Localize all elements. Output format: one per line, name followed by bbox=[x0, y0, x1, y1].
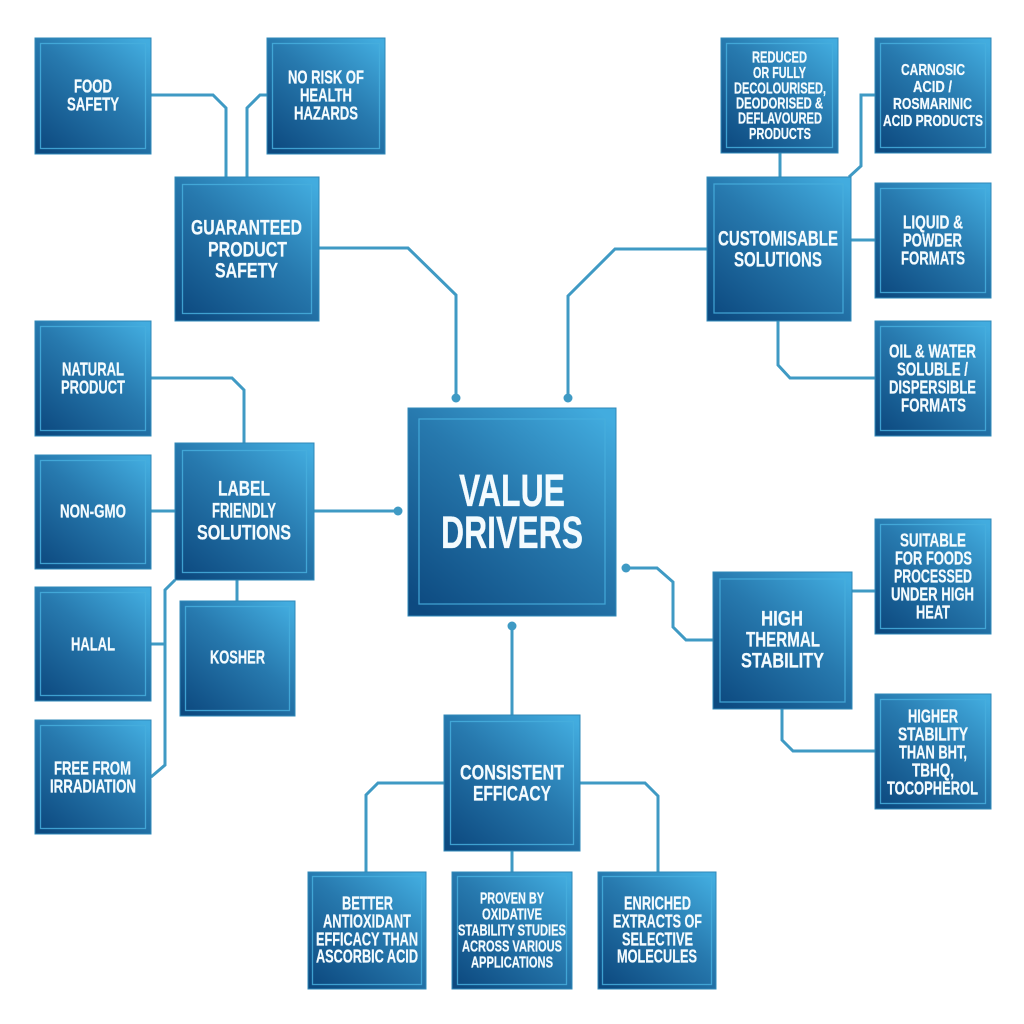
box: enriched extracts of selective molecules bbox=[598, 872, 716, 989]
box: kosher: KOSHER bbox=[210, 646, 265, 668]
box: liquid and powder formats: FORMATS bbox=[901, 248, 965, 268]
box: high thermal stability: STABILITY bbox=[741, 648, 824, 672]
connector: kosher bbox=[236, 580, 238, 601]
box: better antioxidant efficacy: EFFICACY THAN bbox=[316, 928, 418, 950]
connector: high thermal stability to value drivers bbox=[622, 564, 713, 640]
box: liquid and powder formats bbox=[875, 183, 991, 298]
box: food safety: SAFETY bbox=[67, 94, 119, 114]
box: consistent efficacy: EFFICACY bbox=[473, 782, 551, 806]
box: consistent efficacy bbox=[444, 715, 580, 851]
box: food safety bbox=[35, 38, 151, 154]
box: reduced or fully decolourised products bbox=[721, 38, 838, 153]
box: liquid and powder formats: LIQUID & bbox=[903, 212, 963, 232]
connector: label friendly solutions to value drivers bbox=[314, 506, 402, 516]
box: free from irradiation bbox=[35, 720, 151, 834]
box: no risk of health hazards: NO RISK OF bbox=[288, 66, 364, 88]
connector: higher stability bbox=[782, 709, 875, 751]
box: carnosic acid rosmarinic acid products: CARNOSIC bbox=[901, 62, 965, 79]
connector: food safety to guaranteed product safety bbox=[151, 95, 226, 177]
box: reduced or fully decolourised products: REDUCED bbox=[752, 50, 807, 66]
box: oil and water soluble formats bbox=[875, 321, 991, 436]
box: higher stability than bht tbhq tocopherol: STABILITY bbox=[898, 724, 968, 744]
box: oil and water soluble formats: OIL & WATER bbox=[889, 340, 976, 362]
box: natural product: PRODUCT bbox=[61, 376, 125, 398]
box: natural product bbox=[35, 321, 151, 436]
box: proven by oxidative stability studies: OXIDATIVE bbox=[482, 906, 542, 924]
connector: enriched extracts bbox=[580, 783, 658, 872]
box: high thermal stability: THERMAL bbox=[746, 628, 820, 652]
box: customisable solutions: SOLUTIONS bbox=[734, 248, 822, 272]
box: carnosic acid rosmarinic acid products: ACID PRODUCTS bbox=[883, 113, 983, 130]
box: proven by oxidative stability studies: STABILITY STUDIES bbox=[458, 922, 566, 940]
box: oil and water soluble formats: DISPERSIBLE bbox=[889, 376, 976, 398]
box: guaranteed product safety: SAFETY bbox=[215, 258, 278, 282]
central box: value drivers: DRIVERS bbox=[441, 507, 583, 558]
box: reduced or fully decolourised products: DEODORISED & bbox=[736, 96, 823, 112]
box: better antioxidant efficacy bbox=[308, 872, 426, 989]
box: no risk of health hazards: HEALTH bbox=[300, 84, 352, 106]
connector: better antioxidant bbox=[366, 783, 444, 872]
box: no risk of health hazards bbox=[267, 38, 385, 154]
connector: oil and water bbox=[778, 321, 875, 378]
box: liquid and powder formats: POWDER bbox=[903, 230, 962, 250]
box: reduced or fully decolourised products: PRODUCTS bbox=[749, 126, 811, 143]
central box: value drivers: VALUE bbox=[459, 465, 565, 516]
connector: guaranteed product safety to value drivers bbox=[319, 248, 460, 402]
box: guaranteed product safety: GUARANTEED bbox=[191, 216, 302, 240]
box: better antioxidant efficacy: ANTIOXIDANT bbox=[323, 910, 411, 932]
box: suitable for foods processed under high heat: HEAT bbox=[916, 602, 950, 622]
box: reduced or fully decolourised products: DEFLAVOURED bbox=[738, 110, 822, 128]
box: reduced or fully decolourised products: DECOLOURISED, bbox=[734, 80, 826, 98]
box: label friendly solutions: FRIENDLY bbox=[212, 498, 276, 522]
box: free from irradiation: FREE FROM bbox=[54, 758, 131, 778]
box: higher stability than bht tbhq tocopherol: HIGHER bbox=[908, 706, 958, 726]
box: suitable for foods processed under high heat: PROCESSED bbox=[894, 566, 972, 586]
box: natural product: NATURAL bbox=[62, 358, 124, 380]
box: higher stability than bht tbhq tocopherol: TBHQ, bbox=[912, 760, 954, 780]
box: enriched extracts of selective molecules: ENRICHED bbox=[624, 892, 691, 914]
box: proven by oxidative stability studies: APPLICATIONS bbox=[471, 954, 553, 972]
box: proven by oxidative stability studies bbox=[452, 872, 572, 989]
central box: value drivers bbox=[408, 408, 616, 616]
box: suitable for foods processed under high heat: UNDER HIGH bbox=[891, 584, 974, 604]
box: non-gmo: NON-GMO bbox=[60, 500, 126, 522]
box: high thermal stability bbox=[713, 572, 852, 709]
connector: non-gmo bbox=[151, 510, 175, 512]
box: halal: HALAL bbox=[71, 634, 115, 654]
box: label friendly solutions: LABEL bbox=[218, 476, 270, 500]
box: carnosic acid rosmarinic acid products bbox=[875, 38, 991, 153]
box: enriched extracts of selective molecules: MOLECULES bbox=[617, 946, 697, 966]
box: carnosic acid rosmarinic acid products: ROSMARINIC bbox=[893, 96, 972, 113]
connector: natural product bbox=[151, 378, 244, 443]
box: reduced or fully decolourised products: OR FULLY bbox=[753, 65, 806, 82]
box: no risk of health hazards: HAZARDS bbox=[294, 102, 358, 124]
box: better antioxidant efficacy: ASCORBIC ACID bbox=[316, 946, 418, 966]
box: label friendly solutions bbox=[175, 443, 314, 580]
box: oil and water soluble formats: FORMATS bbox=[901, 394, 966, 416]
connector: proven by oxidative bbox=[510, 851, 514, 872]
box: suitable for foods processed under high heat: FOR FOODS bbox=[895, 548, 972, 568]
box: carnosic acid rosmarinic acid products: ACID / bbox=[913, 79, 952, 96]
box: customisable solutions bbox=[707, 177, 851, 321]
box: proven by oxidative stability studies: PROVEN BY bbox=[480, 890, 544, 908]
connector: reduced products bbox=[778, 153, 782, 177]
box: customisable solutions: CUSTOMISABLE bbox=[718, 226, 838, 250]
box: halal bbox=[35, 587, 151, 701]
box: free from irradiation: IRRADIATION bbox=[50, 776, 136, 796]
box: enriched extracts of selective molecules: EXTRACTS OF bbox=[613, 910, 702, 932]
box: enriched extracts of selective molecules: SELECTIVE bbox=[622, 928, 693, 950]
box: proven by oxidative stability studies: ACROSS VARIOUS bbox=[462, 938, 562, 956]
connector: liquid and powder bbox=[851, 238, 875, 242]
box: suitable for foods processed under high heat bbox=[875, 519, 991, 634]
connector: carnosic acid bbox=[849, 95, 875, 177]
connector: consistent efficacy to value drivers bbox=[508, 622, 516, 715]
box: label friendly solutions: SOLUTIONS bbox=[197, 520, 291, 544]
box: suitable for foods processed under high heat: SUITABLE bbox=[900, 530, 966, 550]
box: kosher bbox=[180, 601, 295, 716]
box: oil and water soluble formats: SOLUBLE / bbox=[897, 358, 968, 380]
box: consistent efficacy: CONSISTENT bbox=[460, 760, 564, 784]
box: guaranteed product safety: PRODUCT bbox=[208, 238, 287, 262]
box: higher stability than bht tbhq tocopherol: THAN BHT, bbox=[899, 742, 967, 762]
box: food safety: FOOD bbox=[74, 76, 112, 96]
box: guaranteed product safety bbox=[175, 177, 319, 321]
box: higher stability than bht tbhq tocopherol bbox=[875, 694, 991, 809]
connector: no risk of health hazards to guaranteed product safety bbox=[247, 95, 267, 177]
box: better antioxidant efficacy: BETTER bbox=[342, 892, 393, 914]
box: high thermal stability: HIGH bbox=[761, 606, 803, 630]
box: non-gmo bbox=[35, 455, 151, 569]
connector: suitable for foods bbox=[852, 590, 875, 592]
connector: halal and free from irradiation bbox=[151, 580, 175, 777]
box: higher stability than bht tbhq tocopherol: TOCOPHEROL bbox=[887, 778, 978, 798]
connector: customisable solutions to value drivers bbox=[564, 249, 707, 402]
